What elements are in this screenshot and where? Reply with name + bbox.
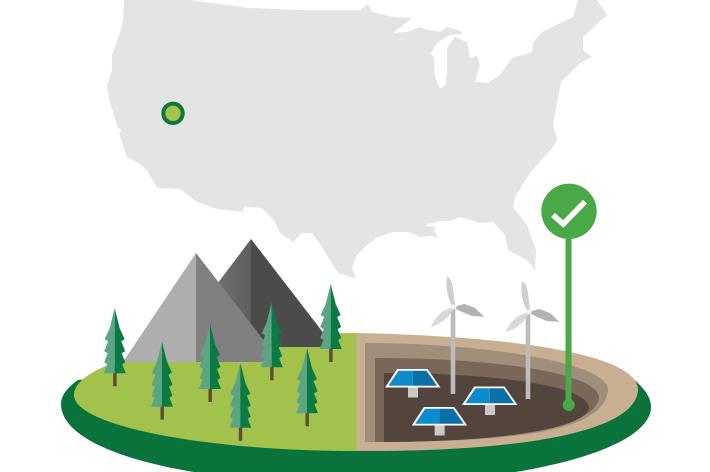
tree 6 [296, 348, 318, 426]
pit rim [356, 333, 638, 451]
tree 4 [229, 363, 251, 441]
icon: check mark [553, 202, 585, 224]
tree 7 [320, 284, 342, 362]
mountain: light peak [123, 253, 272, 362]
mountain: dark peak [205, 239, 325, 347]
pit layer 2 [375, 358, 599, 442]
solar panel 3 [412, 407, 467, 436]
tree 3 [199, 324, 221, 402]
wind turbine 2 [506, 281, 559, 399]
ground: grass half [74, 333, 357, 451]
pit layer 1 [365, 343, 608, 442]
wind turbine 1 [431, 276, 484, 394]
map: United States [107, 0, 607, 278]
trees [104, 284, 342, 441]
excavated pit [356, 333, 638, 451]
solar panel 2 [462, 386, 518, 415]
pit floor [384, 373, 589, 442]
tree 1 [104, 308, 126, 386]
island base [61, 345, 651, 472]
tree 2 [151, 342, 173, 420]
location pin with check mark [541, 184, 597, 411]
tree 5 [261, 302, 283, 380]
map marker: site location [161, 102, 185, 125]
solar panel 1 [385, 369, 440, 398]
